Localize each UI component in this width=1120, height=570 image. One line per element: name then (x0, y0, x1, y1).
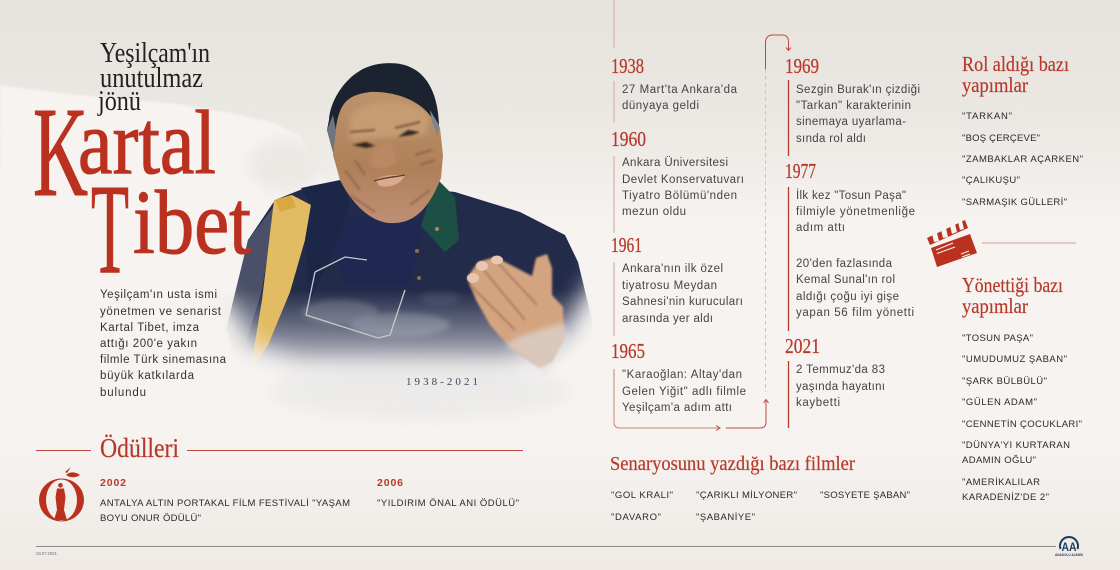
subtitle: Yeşilçam'ın (100, 37, 210, 69)
timeline: 1960: 1960 (611, 127, 646, 151)
timeline: 1965: "Karaoğlan: Altay'dan (622, 369, 742, 381)
heading: awards: Ödülleri (100, 433, 179, 463)
timeline: 1977 (785, 159, 915, 319)
intro paragraph: büyük katkılarda (100, 370, 195, 382)
subtitle (97, 37, 210, 117)
timeline: 1960: Devlet Konservatuvarı (622, 174, 744, 186)
icon: golden orange award (39, 467, 84, 522)
hair (327, 63, 439, 152)
timeline: 1969: Sezgin Burak'ın çizdiği (796, 84, 920, 96)
awards list: "YILDIRIM ÖNAL ANI ÖDÜLÜ" (377, 498, 519, 509)
timeline: 1969 (785, 54, 920, 145)
panel: directed works: yapımlar (962, 294, 1028, 318)
title: Kartal Tibet: artal (78, 92, 216, 193)
timeline: 1969: 1969 (785, 54, 819, 78)
intro paragraph: bulundu (100, 387, 146, 399)
intro paragraph: filmle Türk sinemasına (100, 354, 227, 366)
timeline: 1961: tiyatrosu Meydan (622, 280, 717, 292)
panel: screenplays: "SOSYETE ŞABAN" (820, 490, 910, 501)
panel: directed works: "AMERİKALILAR (962, 477, 1040, 488)
awards list: ANTALYA ALTIN PORTAKAL FİLM FESTİVALİ "YAŞAM (100, 498, 350, 509)
portrait photo of Kartal Tibet (226, 63, 592, 372)
timeline: 1965: Gelen Yiğit" adlı filmle (622, 386, 746, 398)
timeline: 1977: Kemal Sunal'ın rol (796, 274, 895, 286)
awards list: 2002 (100, 477, 126, 489)
timeline: 1965 (611, 339, 746, 414)
timeline: 1965: 1965 (611, 339, 645, 363)
panel: screenplays (610, 453, 910, 523)
panel: acting roles: "SARMAŞIK GÜLLERİ" (962, 197, 1067, 208)
awards list: 2006 (377, 477, 403, 489)
neck and face (333, 85, 443, 223)
divider (982, 242, 1076, 244)
panel: screenplays: "ŞABANİYE" (696, 512, 755, 523)
timeline: 1969: sında rol aldı (796, 133, 866, 145)
title: Kartal Tibet: T (91, 158, 129, 300)
intro paragraph: Yeşilçam'ın usta ismi (100, 289, 217, 301)
timeline connectors (614, 0, 791, 430)
subtitle: jönü (97, 85, 141, 117)
panel: acting roles: "ZAMBAKLAR AÇARKEN" (962, 154, 1083, 165)
timeline: 2021: 2 Temmuz'da 83 (796, 364, 885, 376)
panel: directed works: "CENNETİN ÇOCUKLARI" (962, 419, 1082, 430)
intro paragraph (100, 289, 227, 399)
panel: directed works: "GÜLEN ADAM" (962, 397, 1037, 408)
hand (467, 254, 570, 375)
title: Kartal Tibet (33, 81, 251, 300)
timeline: 1961 (611, 233, 743, 325)
panel: acting roles (962, 52, 1083, 208)
timeline: 1960 (611, 127, 744, 218)
intro paragraph: yönetmen ve senarist (100, 306, 222, 318)
timeline: 1961: arasında yer aldı (622, 313, 713, 325)
timeline: 1969: sinemaya uyarlama- (796, 116, 906, 128)
panel: directed works: KARADENİZ'DE 2" (962, 492, 1049, 503)
panel: acting roles: "ÇALIKUŞU" (962, 175, 1020, 186)
panel: directed works (962, 273, 1082, 503)
timeline: 1938: 1938 (611, 54, 644, 78)
timeline: 1960: Ankara Üniversitesi (622, 157, 728, 169)
subtitle: unutulmaz (100, 62, 203, 94)
timeline: 1977: yapan 56 film yönetti (796, 307, 914, 319)
timeline: 1960: mezun oldu (622, 206, 686, 218)
timeline: 1965: Yeşilçam'a adım attı (622, 402, 732, 414)
panel: directed works: Yönettiği bazı (962, 273, 1063, 297)
timeline: 1977: İlk kez "Tosun Paşa" (796, 189, 906, 202)
logo: Anadolu Agency (1055, 537, 1083, 557)
timeline: 1960: Tiyatro Bölümü'nden (622, 190, 737, 202)
panel: acting roles: Rol aldığı bazı (962, 52, 1069, 76)
logo: Anadolu Agency: ANADOLU AJANSI (1055, 553, 1083, 557)
panel: directed works: "UMUDUMUZ ŞABAN" (962, 354, 1067, 365)
logo: Anadolu Agency: AA (1062, 540, 1077, 554)
icon: film clapperboard (927, 220, 977, 267)
timeline: 1961: Ankara'nın ilk özel (622, 263, 723, 275)
timeline: 1938 (611, 54, 738, 112)
panel: acting roles: yapımlar (962, 73, 1028, 97)
title: Kartal Tibet: ibet (133, 172, 251, 273)
awards list: BOYU ONUR ÖDÜLÜ" (100, 513, 201, 524)
timeline: 1977: 1977 (785, 159, 816, 183)
panel: directed works: "DÜNYA'YI KURTARAN (962, 440, 1070, 451)
panel: acting roles: "BOŞ ÇERÇEVE" (962, 133, 1040, 144)
panel: directed works: "TOSUN PAŞA" (962, 333, 1033, 344)
intro paragraph: Kartal Tibet, imza (100, 322, 200, 334)
timeline: 1938: 27 Mart'ta Ankara'da (622, 84, 738, 96)
timeline: 1977: aldığı çoğu iyi gişe (796, 291, 899, 303)
timeline: 2021: 2021 (785, 334, 820, 358)
panel: directed works: ADAMIN OĞLU" (962, 455, 1036, 466)
panel: acting roles: "TARKAN" (962, 111, 1012, 122)
panel: screenplays: "ÇARIKLI MİLYONER" (696, 490, 797, 501)
timeline: 1969: "Tarkan" karakterinin (796, 100, 911, 112)
timeline: 1977: filmiyle yönetmenliğe (796, 206, 915, 218)
timeline: 2021 (785, 334, 885, 409)
panel: directed works: "ŞARK BÜLBÜLÜ" (962, 376, 1047, 387)
timeline: 1938: dünyaya geldi (622, 100, 699, 112)
life dates: 1938-2021 (406, 376, 478, 388)
timeline: 1977: 20'den fazlasında (796, 258, 893, 270)
timeline: 1977: adım attı (796, 222, 845, 234)
panel: screenplays: Senaryosunu yazdığı bazı filmler (610, 453, 855, 475)
timeline: 2021: kaybetti (796, 397, 840, 409)
footer date: 03.07.2021 (36, 551, 57, 556)
timeline: 1961: Sahnesi'nin kurucuları (622, 296, 743, 308)
title: Kartal Tibet: K (33, 81, 88, 223)
timeline: 1961: 1961 (611, 233, 642, 257)
panel: screenplays: "GOL KRALI" (611, 490, 673, 501)
intro paragraph: attığı 200'e yakın (100, 338, 197, 350)
panel: screenplays: "DAVARO" (611, 512, 661, 523)
awards list (100, 477, 519, 524)
timeline: 2021: yaşında hayatını (796, 381, 885, 393)
footer line (36, 546, 1056, 548)
